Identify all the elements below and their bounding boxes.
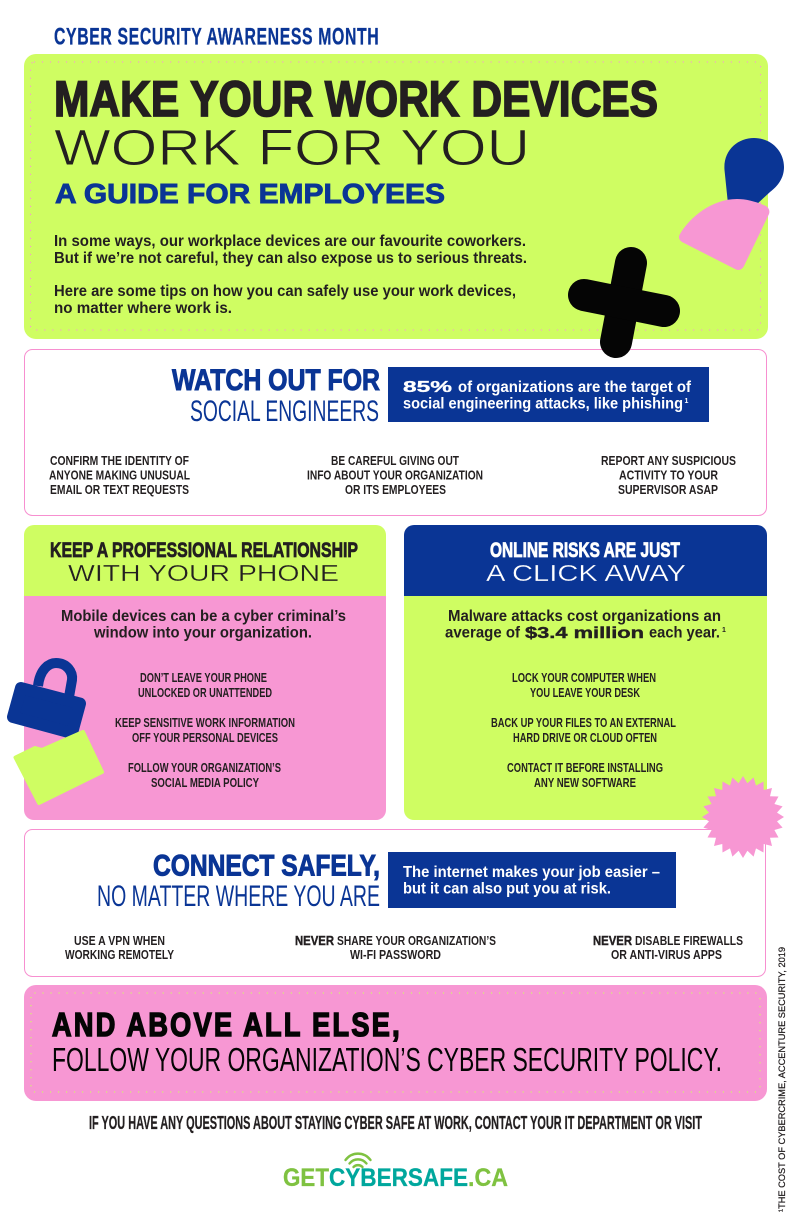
tip: report suspicious activity: ACTIVITY TO YOUR	[619, 468, 718, 482]
icon: pink starburst	[702, 776, 784, 858]
callout: internet risk: The internet makes your job easier –	[403, 864, 660, 881]
main title: MAKE YOUR WORK DEVICES	[54, 71, 658, 127]
callout: 85% statistic	[388, 367, 709, 422]
tip: sensitive work information	[115, 715, 295, 745]
tip: confirm identity	[49, 453, 190, 497]
intro text with statistic	[445, 608, 726, 642]
tip: report suspicious activity	[601, 453, 736, 497]
tip: report suspicious activity: REPORT ANY SUSPICIOUS	[601, 453, 736, 468]
tip: be careful giving info: OR ITS EMPLOYEES	[345, 482, 446, 497]
tip: lock computer: YOU LEAVE YOUR DESK	[530, 685, 641, 700]
icon: plus shape	[584, 263, 664, 342]
panel: professional relationship with phone	[24, 525, 386, 820]
logo: GetCyberSafe: CYBERSAFE	[329, 1164, 468, 1192]
heading	[486, 538, 686, 586]
callout: 85% statistic: 1	[684, 398, 688, 405]
intro text: But if we’re not careful, they can also expose us to serious threats.	[54, 250, 527, 267]
heading	[50, 538, 358, 586]
tip: sensitive work information: KEEP SENSITIVE WORK INFORMATION	[115, 715, 295, 730]
tip: sensitive work information: OFF YOUR PERSONAL DEVICES	[132, 730, 278, 745]
subtitle: A GUIDE FOR EMPLOYEES	[55, 178, 445, 209]
eyebrow heading: CYBER SECURITY AWARENESS MONTH	[54, 24, 379, 50]
tip: report suspicious activity: SUPERVISOR ASAP	[618, 482, 718, 497]
intro text	[61, 608, 346, 642]
heading: WATCH OUT FOR	[172, 364, 380, 397]
intro text: no matter where work is.	[54, 300, 232, 317]
heading	[172, 364, 380, 428]
tip: social media policy: SOCIAL MEDIA POLICY	[151, 775, 259, 790]
callout: 85% statistic: social engineering attacks, like phishing	[403, 396, 683, 412]
tip: social media policy	[128, 760, 281, 790]
intro text with statistic: 1	[722, 627, 726, 634]
panel: hero introduction	[24, 54, 768, 339]
intro text with statistic: average of	[445, 624, 521, 642]
tip: lock computer	[512, 670, 656, 700]
tip: social media policy: FOLLOW YOUR ORGANIZATION’S	[128, 760, 281, 775]
closing message	[52, 1008, 722, 1078]
panel: watch out for social engineers	[24, 350, 766, 516]
main title: WORK FOR YOU	[54, 119, 530, 176]
intro text with statistic: each year.	[649, 624, 720, 642]
tip: never share wi-fi password	[295, 933, 496, 962]
heading: SOCIAL ENGINEERS	[190, 395, 379, 428]
logo: GetCyberSafe	[283, 1154, 508, 1192]
intro text: window into your organization.	[93, 624, 312, 642]
tip: never disable firewalls: DISABLE FIREWALLS	[635, 933, 743, 948]
panel: connect safely	[24, 830, 766, 976]
callout: 85% statistic: 85%	[403, 379, 452, 396]
panel: online risks	[404, 525, 767, 820]
heading: CONNECT SAFELY,	[153, 850, 380, 882]
tip: do not leave phone	[138, 670, 272, 700]
intro text with statistic: Malware attacks cost organizations an	[448, 608, 721, 625]
icon: lime folder	[16, 732, 102, 803]
tip: contact IT: ANY NEW SOFTWARE	[534, 775, 636, 790]
tip: never share wi-fi password: NEVER	[295, 933, 334, 948]
panel: above all else	[24, 985, 767, 1101]
tip: do not leave phone: DON’T LEAVE YOUR PHONE	[140, 670, 267, 685]
logo: GetCyberSafe: GET	[283, 1164, 329, 1192]
callout: 85% statistic: of organizations are the target of	[458, 379, 692, 396]
tip: never share wi-fi password: WI-FI PASSWORD	[350, 947, 441, 962]
intro text with statistic: $3.4 million	[525, 625, 644, 642]
icon: blue blob	[724, 138, 784, 205]
callout: internet risk: but it can also put you at risk.	[403, 880, 611, 898]
intro text: Here are some tips on how you can safely use your work devices,	[54, 283, 516, 300]
intro text: Mobile devices can be a cyber criminal’s	[61, 608, 346, 625]
icon: padlock	[13, 663, 80, 733]
tip: never disable firewalls: NEVER	[593, 933, 632, 948]
closing message: AND ABOVE ALL ELSE,	[52, 1008, 400, 1044]
source citation: ¹THE COST OF CYBERCRIME, ACCENTURE SECURITY, 2019	[777, 947, 788, 1212]
main title	[54, 71, 658, 176]
heading: A CLICK AWAY	[486, 560, 686, 586]
tip: do not leave phone: UNLOCKED OR UNATTENDED	[138, 685, 272, 700]
tip: be careful giving info: BE CAREFUL GIVING OUT	[331, 453, 459, 468]
heading: KEEP A PROFESSIONAL RELATIONSHIP	[50, 538, 358, 562]
tip: confirm identity: ANYONE MAKING UNUSUAL	[49, 468, 190, 482]
icon: pink semicircle	[679, 199, 769, 270]
tip: be careful giving info: INFO ABOUT YOUR ORGANIZATION	[307, 468, 483, 482]
tip: use a VPN: WORKING REMOTELY	[65, 947, 174, 962]
tip: back up files: HARD DRIVE OR CLOUD OFTEN	[513, 730, 657, 745]
tip: be careful giving info	[307, 453, 483, 497]
tip: contact IT: CONTACT IT BEFORE INSTALLING	[507, 760, 663, 775]
tip: back up files: BACK UP YOUR FILES TO AN EXTERNAL	[491, 715, 676, 730]
callout: internet risk	[388, 852, 676, 908]
heading	[97, 850, 380, 913]
tip: never share wi-fi password: SHARE YOUR ORGANIZATION’S	[337, 933, 496, 948]
icon: wifi signal	[346, 1154, 370, 1167]
tip: confirm identity: EMAIL OR TEXT REQUESTS	[50, 482, 189, 497]
heading: WITH YOUR PHONE	[68, 560, 339, 586]
tip: contact IT	[507, 760, 663, 790]
tip: use a VPN: USE A VPN WHEN	[74, 933, 165, 948]
tip: never disable firewalls	[593, 933, 743, 962]
intro text	[54, 233, 527, 317]
intro text: In some ways, our workplace devices are our favourite coworkers.	[54, 233, 526, 250]
tip: lock computer: LOCK YOUR COMPUTER WHEN	[512, 670, 656, 685]
tip: use a VPN	[65, 933, 174, 962]
tip: never disable firewalls: OR ANTI-VIRUS APPS	[611, 947, 722, 962]
tip: confirm identity: CONFIRM THE IDENTITY OF	[50, 453, 189, 468]
heading: NO MATTER WHERE YOU ARE	[97, 880, 380, 913]
logo: GetCyberSafe: .CA	[468, 1164, 508, 1192]
heading: ONLINE RISKS ARE JUST	[490, 538, 680, 562]
tip: back up files	[491, 715, 676, 745]
